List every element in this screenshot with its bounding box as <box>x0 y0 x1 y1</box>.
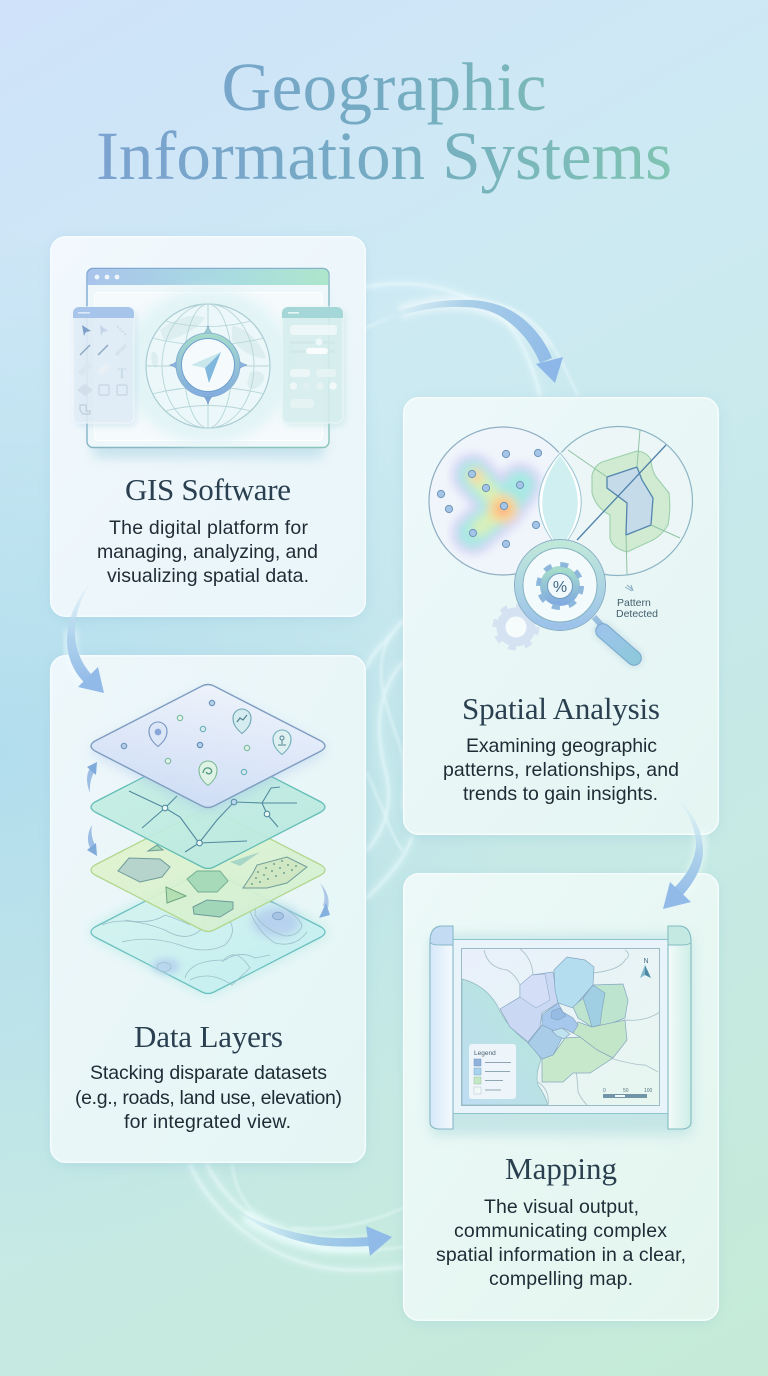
magnifying glass <box>514 540 634 658</box>
layer: elevation contours <box>91 870 325 994</box>
icon: globe <box>146 304 270 428</box>
map <box>462 948 660 1106</box>
heading: Mapping <box>505 1151 617 1186</box>
icon: location pin trend <box>233 709 251 734</box>
legend <box>469 1044 516 1099</box>
description: communicating complex <box>454 1220 667 1242</box>
map regions <box>500 957 628 1082</box>
description <box>75 1062 342 1133</box>
illustration: spatial analysis overlay <box>429 426 692 658</box>
tool panel <box>73 307 136 426</box>
north arrow: N <box>643 958 649 965</box>
callout: pattern detected: Pattern <box>617 597 651 609</box>
illustration: stacked layers <box>87 684 330 994</box>
icon: location pin marker <box>273 730 291 754</box>
layer: land use <box>91 808 325 932</box>
illustration: GIS software window <box>73 268 345 458</box>
layer: points of interest <box>91 684 325 812</box>
heading: Data Layers <box>134 1019 283 1054</box>
scale bar: 0 <box>603 1088 606 1094</box>
panel: Data Layers <box>51 656 365 1165</box>
scroll roll left <box>430 926 453 1129</box>
faded gear <box>495 606 537 648</box>
panel: GIS Software <box>51 237 365 618</box>
layer: road network <box>91 746 325 868</box>
arrow: GIS Software to Spatial Analysis <box>367 300 563 383</box>
scale bar: 100 <box>644 1088 653 1094</box>
description: compelling map. <box>489 1268 633 1290</box>
overlap lens <box>539 453 581 540</box>
description <box>443 735 679 805</box>
icon: location pin blue <box>149 722 167 746</box>
title: Geographic <box>222 49 546 125</box>
description: (e.g., roads, land use, elevation) <box>75 1087 342 1109</box>
roads <box>484 949 660 1105</box>
description: patterns, relationships, and <box>443 759 679 781</box>
callout: pattern detected <box>616 585 658 620</box>
description: The visual output, <box>484 1196 639 1218</box>
description: trends to gain insights. <box>463 783 658 805</box>
settings panel <box>282 307 345 426</box>
heading: GIS Software <box>125 472 291 507</box>
description: Examining geographic <box>466 735 657 757</box>
illustration: map scroll <box>430 926 692 1135</box>
description <box>436 1196 686 1290</box>
scroll roll right <box>668 926 691 1129</box>
icon: location pin green <box>199 761 217 786</box>
panel: Mapping <box>404 874 718 1322</box>
arrow: layer cycle down right <box>319 883 330 918</box>
arrow: Data Layers to Mapping <box>233 1207 392 1256</box>
tool panel: T <box>117 366 127 382</box>
arrow: Spatial Analysis to Mapping <box>663 798 703 909</box>
scale bar: 50 <box>623 1088 629 1094</box>
north arrow <box>640 958 651 978</box>
arrow: layer cycle down <box>87 825 97 856</box>
description <box>97 517 318 587</box>
arrow: layer cycle up <box>87 762 97 793</box>
arrow: GIS Software to Data Layers <box>67 583 104 693</box>
description: Stacking disparate datasets <box>90 1062 327 1084</box>
legend: Legend <box>474 1050 496 1057</box>
description: managing, analyzing, and <box>97 541 318 563</box>
heading: Spatial Analysis <box>462 691 660 726</box>
description: The digital platform for <box>109 517 308 539</box>
icon: percent gear: % <box>553 579 567 596</box>
heat map circle <box>429 427 577 575</box>
scale bar <box>603 1088 653 1098</box>
icon: compass <box>170 326 247 404</box>
buffer zone circle <box>544 426 692 576</box>
title: Information Systems <box>96 118 672 194</box>
description: visualizing spatial data. <box>107 565 309 587</box>
panel: Spatial Analysis <box>404 398 718 837</box>
decorative glowing swirls behind the cards <box>190 283 578 1270</box>
description: for integrated view. <box>124 1111 291 1133</box>
callout: pattern detected: Detected <box>616 608 658 620</box>
coast and sea <box>462 979 548 1105</box>
title <box>96 49 672 194</box>
description: spatial information in a clear, <box>436 1244 686 1266</box>
